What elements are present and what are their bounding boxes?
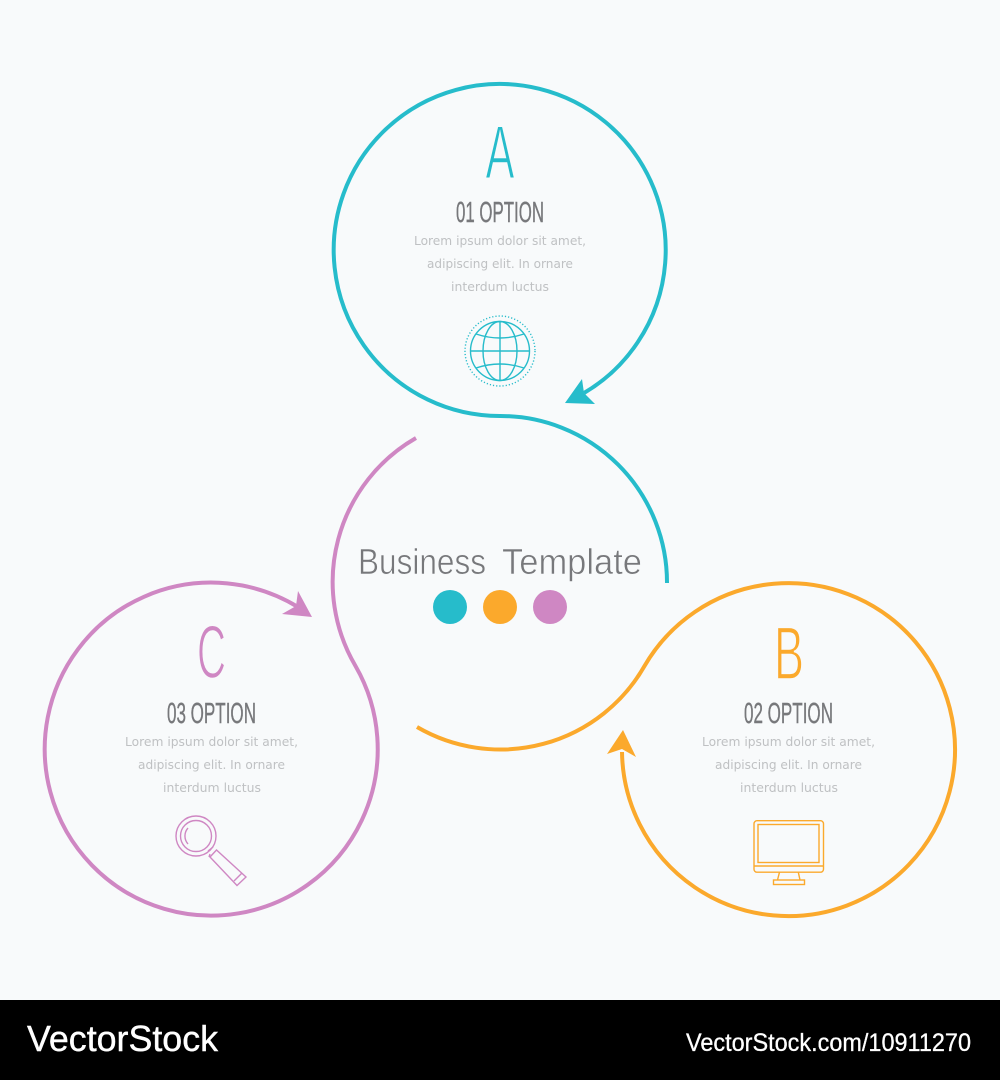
footer url text: VectorStock.com/10911270 [686, 1029, 971, 1057]
text block: option B description: adipiscing elit. In ornare [715, 757, 862, 772]
text block: option A description: interdum luctus [451, 279, 549, 294]
letter A: A [486, 110, 514, 194]
legend dots [433, 590, 567, 624]
letter C: C [197, 610, 226, 694]
text block: option C description: adipiscing elit. In ornare [138, 757, 285, 772]
orange loop path with arrow [417, 583, 955, 916]
panel: option C [125, 610, 298, 886]
text block: option C description: Lorem ipsum dolor sit amet, [125, 734, 298, 749]
letter B: B [774, 611, 804, 695]
footer logo text: VectorStock [27, 1018, 219, 1059]
text block: option B description [702, 734, 875, 795]
icon: globe [465, 316, 535, 386]
title: Business Template [358, 541, 642, 582]
text block: option C description [125, 734, 298, 795]
footer bar [0, 1000, 1000, 1080]
title: Business Template: Business [358, 541, 486, 582]
heading: 03 option: 03 OPTION [167, 698, 256, 730]
icon: magnifier [176, 816, 246, 886]
heading: 01 option: 01 OPTION [456, 197, 544, 229]
text block: option A description: adipiscing elit. In ornare [427, 256, 573, 271]
text block: option C description: interdum luctus [163, 780, 261, 795]
panel: option B [702, 611, 875, 884]
teal loop path with arrow [334, 84, 667, 583]
text block: option A description: Lorem ipsum dolor sit amet, [414, 233, 586, 248]
text block: option B description: Lorem ipsum dolor sit amet, [702, 734, 875, 749]
text block: option B description: interdum luctus [740, 780, 838, 795]
icon: monitor [754, 821, 824, 884]
heading: 02 option: 02 OPTION [744, 698, 833, 730]
text block: option A description [414, 233, 586, 294]
title: Business Template: Template [502, 541, 642, 582]
purple loop path with arrow [45, 438, 416, 916]
panel: option A [414, 110, 586, 386]
